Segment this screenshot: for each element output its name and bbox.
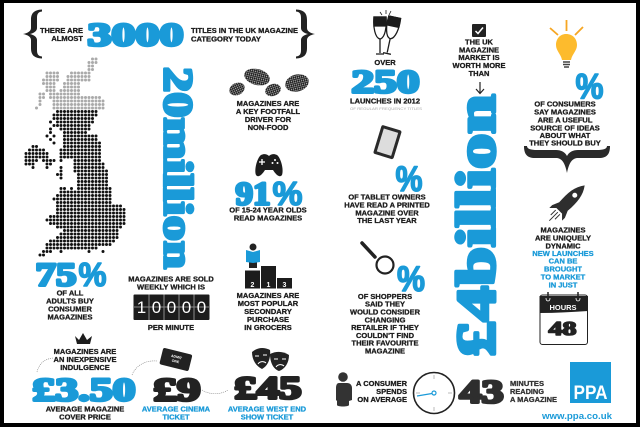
icon: ticket: ONE [171, 359, 180, 364]
caption: OF ALL [57, 288, 84, 297]
caption: WORTH MORE [453, 61, 505, 70]
label over: OVER [374, 58, 396, 67]
caption [350, 292, 421, 355]
stat: cinema ticket [142, 348, 211, 421]
percent sign: % [272, 175, 302, 212]
caption [237, 291, 299, 332]
arrow: to price [37, 358, 53, 372]
flip counter: 0 [197, 298, 206, 317]
caption: MOST POPULAR [238, 299, 299, 308]
caption [356, 379, 408, 404]
stat: tablet owners [344, 125, 430, 225]
caption: A MAGAZINE [510, 395, 557, 404]
intro text line 2: ALMOST [51, 34, 83, 43]
caption blue: NEW LAUNCHES [532, 249, 594, 258]
caption [142, 404, 211, 421]
intro text: THERE ARE [40, 26, 83, 35]
logo: PPA: PPA [574, 383, 608, 404]
caption top: MAGAZINES ARE [54, 347, 116, 356]
icon: game controller [255, 154, 283, 176]
rotated headline: £4billion [446, 94, 506, 356]
icon: person [336, 372, 352, 406]
caption black: ARE UNIQUELY [535, 234, 591, 243]
website url: www.ppa.co.uk [541, 411, 613, 422]
trailing text: TITLES IN THE UK MAGAZINE [191, 26, 298, 35]
stat: 250 launches [350, 10, 423, 111]
icon: champagne glasses [374, 10, 401, 55]
caption: SAY MAGAZINES [534, 108, 596, 117]
stat: cover price [32, 333, 136, 421]
caption: ARE A USEFUL [538, 115, 593, 124]
caption: MARKET IS [458, 53, 500, 62]
caption blue [532, 249, 594, 289]
caption: SPENDS [376, 387, 407, 396]
caption [529, 100, 601, 148]
stat: 10000 per minute [128, 275, 214, 332]
caption bottom: PER MINUTE [148, 323, 194, 332]
caption: READING [510, 387, 544, 396]
caption: CHANGING [365, 315, 406, 324]
number 3000: 3000 [88, 18, 184, 54]
caption: THAN [469, 69, 489, 78]
flip counter: 0 [152, 298, 161, 317]
icon: podium with reader: 3 [283, 282, 287, 289]
icon: calendar 48 hours: HOURS [549, 303, 577, 312]
arrow: down [476, 82, 484, 94]
icon: crown [75, 333, 92, 344]
caption bottom: AVERAGE MAGAZINE [46, 405, 124, 414]
arrow: to theatre ticket [202, 390, 228, 394]
caption: OF TABLET OWNERS [348, 192, 426, 202]
number 75: 75 [36, 258, 76, 294]
caption top [54, 347, 116, 372]
stat: consumers [524, 20, 610, 173]
dot map of the UK [26, 59, 124, 255]
caption: MAGAZINE OVER [355, 208, 419, 218]
caption [229, 206, 307, 222]
caption: MAGAZINES [48, 312, 92, 321]
number 3.50: £3.50 [32, 372, 136, 408]
flip counter: 1 [137, 298, 146, 317]
caption: SECONDARY [244, 307, 292, 316]
caption: OF CONSUMERS [534, 100, 596, 109]
caption [510, 379, 557, 404]
caption: MAGAZINE [459, 45, 499, 54]
caption: SAID THEY [365, 300, 405, 309]
caption: COULDN'T FIND [356, 331, 415, 340]
trailing text line 2: CATEGORY TODAY [191, 34, 261, 44]
flip counter: 0 [167, 298, 176, 317]
logo: PPA [570, 362, 611, 404]
stat: west end ticket [228, 348, 307, 421]
caption: THEIR FAVOURITE [352, 339, 418, 348]
small caption: OF REGULAR FREQUENCY TITLES [350, 107, 423, 111]
caption top [128, 275, 214, 292]
caption: READ MAGAZINES [234, 214, 302, 222]
icon: ticket [159, 348, 192, 371]
stat: 4 billion market [446, 24, 506, 356]
caption [228, 405, 307, 421]
caption blue: BROUGHT [544, 265, 582, 274]
icon: podium with reader: 1 [267, 282, 271, 289]
caption blue: TO MARKET [541, 272, 586, 281]
icon: checkbox [472, 24, 486, 37]
caption: MAGAZINE [365, 346, 405, 355]
caption top: INDULGENCE [60, 363, 110, 372]
stat: 43 minutes [336, 372, 557, 414]
stat: footfall driver [227, 66, 311, 132]
caption black: DYNAMIC [546, 241, 581, 250]
headline: 3000 titles [23, 10, 315, 58]
caption: THE LAST YEAR [357, 216, 417, 225]
percent sign: % [397, 260, 425, 299]
caption: ADULTS BUY [46, 296, 94, 305]
caption top: AN INEXPENSIVE [54, 355, 116, 364]
caption [46, 288, 94, 321]
caption bottom: COVER PRICE [59, 412, 111, 421]
caption: SHOW TICKET [241, 412, 294, 421]
caption: OF 15-24 YEAR OLDS [229, 206, 307, 214]
number 9 pounds: £9 [154, 372, 200, 408]
stat: 75% adults [36, 256, 106, 321]
caption blue: CAN BE [549, 257, 577, 266]
stat: 91% [229, 154, 307, 222]
caption [453, 37, 505, 78]
caption: A CONSUMER [356, 379, 408, 388]
caption: DRIVER FOR [245, 115, 292, 124]
flip counter [133, 294, 210, 320]
caption: MAGAZINES ARE [237, 99, 299, 108]
icon: left brace [23, 10, 42, 58]
caption top: MAGAZINES ARE SOLD [128, 275, 214, 284]
rotated headline: 20million: 20million [156, 67, 202, 269]
stat: shoppers [350, 243, 425, 355]
caption: ABOUT WHAT [540, 131, 591, 140]
arrow: to cinema ticket [132, 361, 157, 375]
icon: podium with reader: 2 [251, 282, 255, 289]
icon: tablet [373, 125, 402, 160]
caption: CONSUMER [48, 304, 92, 313]
number 91: 91 [236, 176, 270, 212]
caption: RETAILER IF THEY [351, 323, 419, 332]
caption black [535, 226, 591, 250]
caption: AVERAGE WEST END [228, 405, 307, 414]
icon: theatre masks [252, 348, 289, 371]
icon: calendar 48 hours [540, 292, 588, 344]
icon: calendar 48 hours: 48 [548, 318, 576, 340]
icon: bottom brace [524, 146, 610, 173]
caption: LAUNCHES IN 2012 [350, 96, 420, 106]
caption: AVERAGE CINEMA [142, 404, 211, 414]
stat: secondary purchase [237, 244, 299, 332]
number 250: 250 [352, 64, 420, 100]
percent sign: % [396, 160, 422, 199]
caption: NON-FOOD [248, 123, 289, 132]
caption: MINUTES [510, 379, 544, 388]
caption: MAGAZINES ARE [237, 291, 299, 300]
icon: right brace [296, 10, 315, 58]
flip counter: 0 [182, 298, 191, 317]
caption: A KEY FOOTFALL [236, 107, 301, 116]
Scotland lowlands, Ireland, England and Wales in black [26, 112, 124, 255]
number 43: 43 [460, 374, 504, 410]
caption: ON AVERAGE [357, 395, 407, 404]
caption [236, 99, 301, 132]
caption: PURCHASE [247, 315, 289, 324]
percent sign: % [78, 256, 106, 293]
stat: dynamic launches [532, 179, 594, 344]
caption blue: IN JUST [549, 280, 578, 289]
caption: WOULD CONSIDER [350, 308, 421, 317]
number 45 pounds: £45 [234, 370, 302, 406]
caption [344, 192, 430, 225]
caption: TICKET [162, 412, 190, 421]
caption: HAVE READ A PRINTED [344, 200, 430, 210]
percent sign: % [576, 68, 604, 106]
icon: footprints [227, 66, 311, 98]
icon: magnifier [362, 243, 394, 274]
icon: light bulb [550, 20, 583, 67]
caption black: MAGAZINES [540, 226, 586, 235]
caption: THE UK [465, 37, 494, 46]
caption: OF SHOPPERS [358, 292, 412, 301]
icon: clock [414, 372, 454, 414]
caption bottom [46, 405, 124, 421]
icon: podium with reader [245, 244, 292, 289]
Scotland highlands in grey [36, 59, 103, 108]
icon: rocket [543, 179, 591, 227]
icon: ticket: ADMIT [171, 354, 183, 361]
caption top: WEEKLY WHICH IS [137, 283, 205, 292]
caption: IN GROCERS [244, 323, 292, 332]
caption: SOURCE OF IDEAS [530, 123, 600, 132]
caption: THEY SHOULD BUY [529, 139, 601, 148]
